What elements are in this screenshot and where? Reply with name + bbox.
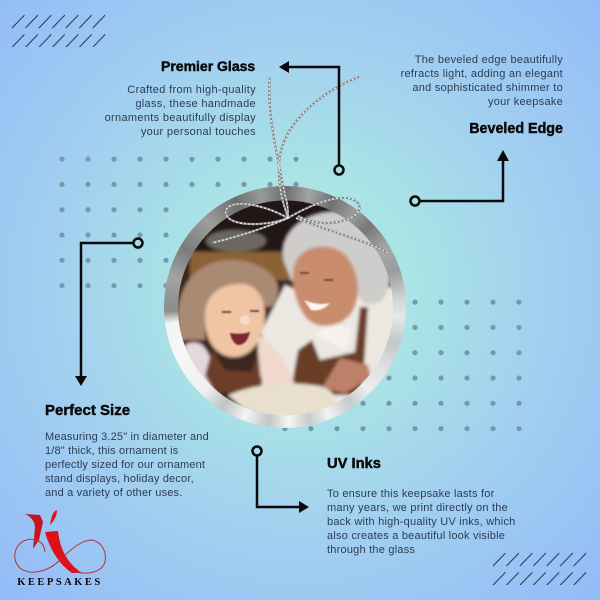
heading: perfect size: Perfect Size — [45, 402, 130, 419]
logo wordmark: KEEPSAKES — [17, 577, 103, 588]
text: uv inks — [327, 488, 516, 556]
text: perfect size: stand displays, holiday decor, — [45, 473, 194, 485]
heading: premier glass: Premier Glass — [161, 58, 255, 74]
arrow: perfect size — [75, 238, 142, 386]
girl apron — [205, 350, 262, 393]
text: perfect size: perfectly sized for our ornament — [45, 459, 205, 471]
grandmother apron — [290, 307, 368, 395]
text: beveled edge: and sophisticated shimmer to — [412, 82, 563, 94]
heading: uv inks: UV Inks — [327, 456, 381, 472]
arrow: uv inks — [252, 446, 309, 513]
ornament glass rim — [164, 186, 406, 428]
logo mark — [15, 510, 105, 573]
text: beveled edge: The beveled edge beautifully — [415, 54, 563, 66]
text: uv inks: back with high-quality UV inks, which — [327, 516, 516, 528]
smiles and eyes — [304, 300, 330, 310]
text: uv inks: To ensure this keepsake lasts for — [327, 488, 494, 500]
text: premier glass: ornaments beautifully display — [105, 112, 256, 124]
grandmother cardigan — [262, 285, 400, 420]
flour pile — [228, 383, 336, 418]
text: perfect size: 1/8" thick, this ornament is — [45, 445, 178, 457]
text: beveled edge — [401, 54, 563, 108]
grandmother hair back — [283, 212, 390, 304]
girl shirt — [185, 342, 214, 392]
ornament photo and cord — [178, 75, 393, 416]
arrow: beveled edge — [410, 150, 509, 206]
text: premier glass — [105, 84, 256, 138]
text: uv inks: through the glass — [327, 544, 415, 556]
grandmother face — [293, 246, 358, 326]
text: perfect size: Measuring 3.25" in diameter and — [45, 431, 209, 443]
text: beveled edge: refracts light, adding an elegant — [401, 68, 563, 80]
text: uv inks: many years, we print directly on the — [327, 502, 508, 514]
text: perfect size: and a variety of other uses. — [45, 487, 182, 499]
arrow: premier glass — [279, 61, 344, 174]
photo of grandmother and child baking — [178, 200, 393, 416]
text: premier glass: glass, these handmade — [135, 98, 256, 110]
silver cord and bow — [212, 76, 388, 253]
text: premier glass: your personal touches — [141, 126, 256, 138]
text: perfect size — [45, 431, 209, 499]
text: uv inks: also creates a beautiful look visible — [327, 530, 505, 542]
text: beveled edge: your keepsake — [488, 96, 563, 108]
girl hair — [178, 260, 278, 340]
girl face — [205, 284, 265, 357]
heading: beveled edge: Beveled Edge — [469, 121, 563, 137]
grandmother hand — [322, 358, 371, 393]
text: premier glass: Crafted from high-quality — [127, 84, 256, 96]
